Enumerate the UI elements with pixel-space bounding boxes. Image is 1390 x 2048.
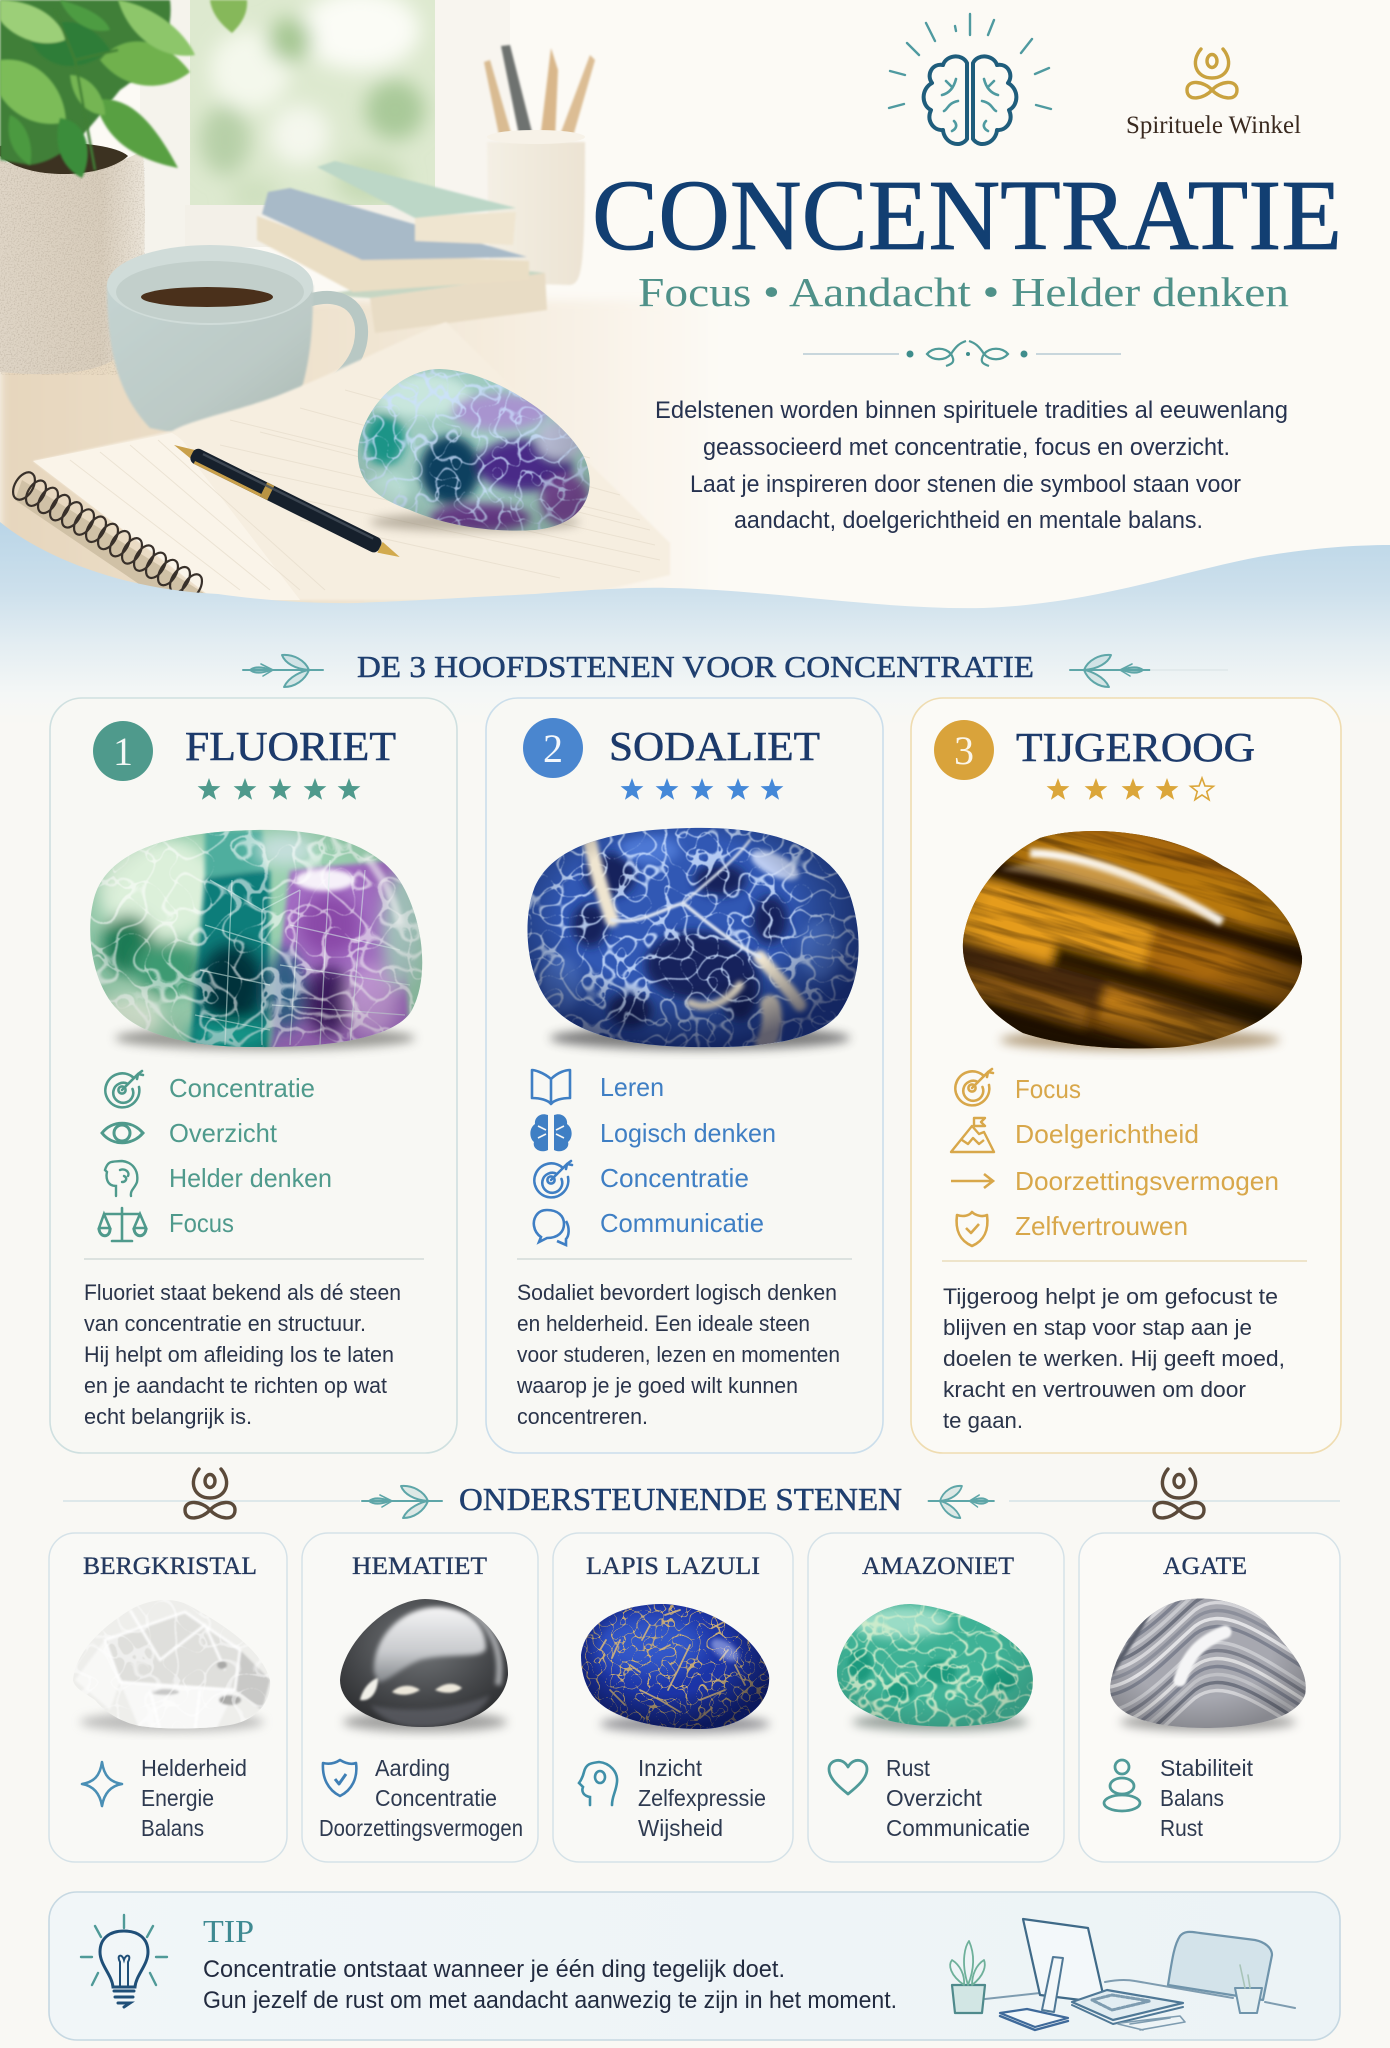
description sodaliet: waarop je je goed wilt kunnen <box>516 1373 798 1398</box>
description sodaliet: Sodaliet bevordert logisch denken <box>517 1280 837 1305</box>
stone: agate <box>1110 1598 1306 1738</box>
icon: target <box>105 1071 143 1107</box>
description tijgeroog: te gaan. <box>943 1408 1023 1433</box>
intro text: Edelstenen worden binnen spirituele tradities al eeuwenlang <box>655 397 1288 424</box>
icon: yoga right <box>1154 1469 1204 1518</box>
section heading: de 3 hoofdstenen: DE 3 HOOFDSTENEN VOOR CONCENTRATIE <box>357 649 1034 684</box>
icon: shield <box>957 1212 987 1246</box>
hero photo: desk scene with plant, mug, books, notebook and fluorite <box>0 0 671 604</box>
panel: fluoriet <box>50 698 457 1453</box>
stone: bergkristal <box>70 1595 275 1735</box>
card: lapis lazuli: LAPIS LAZULI <box>586 1553 760 1580</box>
card: hematiet <box>302 1533 538 1862</box>
pen <box>170 438 403 564</box>
coffee mug <box>107 245 362 440</box>
description fluoriet: echt belangrijk is. <box>84 1404 252 1429</box>
window frame <box>140 0 510 275</box>
rating stars <box>621 778 783 800</box>
benefits hematiet: Aarding <box>375 1755 450 1781</box>
benefits amazoniet <box>886 1755 1030 1841</box>
tip text: Gun jezelf de rust om met aandacht aanwezig te zijn in het moment. <box>203 1987 897 2014</box>
benefits lapis lazuli <box>638 1755 766 1841</box>
number badge 2 <box>523 718 583 778</box>
fluorite stone on notebook <box>350 365 600 535</box>
heading fluoriet: FLUORIET <box>185 723 396 769</box>
benefits bergkristal: Energie <box>141 1785 214 1811</box>
stone: amazoniet <box>830 1600 1040 1732</box>
stone: hematiet <box>335 1595 515 1735</box>
icon: arrow <box>951 1174 993 1188</box>
benefits hematiet: Doorzettingsvermogen <box>319 1815 523 1841</box>
description tijgeroog: doelen te werken. Hij geeft moed, <box>943 1346 1285 1371</box>
intro text: Laat je inspireren door stenen die symbool staan voor <box>690 471 1241 498</box>
benefits hematiet <box>319 1755 523 1841</box>
benefits list sodaliet: Communicatie <box>600 1208 764 1238</box>
icon: target <box>534 1161 572 1197</box>
ornament divider <box>803 341 1121 366</box>
description tijgeroog <box>943 1284 1285 1433</box>
logo: Spirituele Winkel: Spirituele Winkel <box>1126 112 1301 139</box>
benefits lapis lazuli: Inzicht <box>638 1755 703 1781</box>
subtitle: Focus • Aandacht • Helder denken <box>638 269 1289 315</box>
icon: chat <box>534 1210 569 1245</box>
benefits list tijgeroog <box>951 1069 1279 1246</box>
icon: mountain flag <box>951 1118 994 1152</box>
description sodaliet: concentreren. <box>517 1404 648 1429</box>
tip text <box>203 1956 897 2014</box>
section heading: ondersteunende stenen: ONDERSTEUNENDE STENEN <box>459 1481 902 1517</box>
benefits agate: Balans <box>1160 1785 1224 1811</box>
section heading: de 3 hoofdstenen <box>243 649 1228 687</box>
icon: target <box>955 1069 993 1105</box>
icon: stacked stones <box>1104 1760 1140 1811</box>
icon: eye <box>102 1123 143 1143</box>
stone: lapis lazuli <box>575 1600 775 1735</box>
card: amazoniet: AMAZONIET <box>862 1553 1014 1580</box>
description tijgeroog: kracht en vertrouwen om door <box>943 1377 1246 1402</box>
tip text: Concentratie ontstaat wanneer je één ding tegelijk doet. <box>203 1956 785 1983</box>
wave band <box>0 522 1390 730</box>
benefits list fluoriet: Overzicht <box>169 1118 278 1148</box>
desk illustration <box>950 1919 1295 2030</box>
icon: heart <box>829 1760 867 1794</box>
icon: lightbulb <box>81 1915 167 2007</box>
section heading: ondersteunende stenen <box>63 1469 1340 1518</box>
benefits lapis lazuli: Zelfexpressie <box>638 1785 766 1811</box>
icon: scales <box>99 1208 146 1241</box>
benefits amazoniet: Communicatie <box>886 1815 1030 1841</box>
card: agate: AGATE <box>1163 1553 1247 1580</box>
heading sodaliet: SODALIET <box>609 723 820 769</box>
description tijgeroog: Tijgeroog helpt je om gefocust te <box>943 1284 1278 1309</box>
description fluoriet: van concentratie en structuur. <box>84 1311 366 1336</box>
icon: sparkle <box>82 1762 122 1806</box>
benefits list fluoriet: Helder denken <box>169 1163 332 1193</box>
benefits list tijgeroog: Focus <box>1015 1074 1081 1104</box>
card: agate <box>1079 1533 1340 1862</box>
icon: shield <box>323 1760 356 1796</box>
number badge 1: 1 <box>113 729 133 774</box>
description fluoriet: en je aandacht te richten op wat <box>84 1373 387 1398</box>
card: lapis lazuli <box>553 1533 793 1862</box>
heading tijgeroog: TIJGEROOG <box>1016 724 1255 770</box>
stack of books <box>257 161 547 333</box>
stone: sodaliet <box>520 822 865 1052</box>
open notebook <box>33 322 670 600</box>
description tijgeroog: blijven en stap voor stap aan je <box>943 1315 1252 1340</box>
icon: book <box>532 1070 570 1104</box>
benefits amazoniet: Overzicht <box>886 1785 983 1811</box>
description sodaliet: voor studeren, lezen en momenten <box>517 1342 840 1367</box>
number badge 1 <box>93 721 153 781</box>
rating stars <box>1047 778 1213 800</box>
icon: brain <box>530 1114 572 1151</box>
card: bergkristal: BERGKRISTAL <box>83 1553 257 1580</box>
benefits list tijgeroog: Zelfvertrouwen <box>1015 1211 1188 1241</box>
benefits list fluoriet: Focus <box>169 1208 234 1238</box>
description sodaliet <box>516 1280 840 1429</box>
benefits bergkristal: Balans <box>141 1815 204 1841</box>
benefits list sodaliet: Leren <box>600 1072 664 1102</box>
number badge 3: 3 <box>954 728 974 773</box>
panel: sodaliet <box>486 698 883 1453</box>
benefits hematiet: Concentratie <box>375 1785 497 1811</box>
pencil cup with pencils <box>484 45 595 285</box>
benefits list tijgeroog: Doelgerichtheid <box>1015 1119 1199 1149</box>
description fluoriet <box>84 1280 401 1429</box>
number badge 2: 2 <box>543 726 563 771</box>
window with blurred garden <box>190 0 435 213</box>
title: CONCENTRATIE <box>592 159 1342 271</box>
description fluoriet: Fluoriet staat bekend als dé steen <box>84 1280 401 1305</box>
benefits list fluoriet: Concentratie <box>169 1073 315 1103</box>
icon: head <box>579 1762 617 1805</box>
logo: Spirituele Winkel <box>1126 49 1301 139</box>
benefits agate: Stabiliteit <box>1160 1755 1254 1781</box>
benefits bergkristal <box>141 1755 247 1841</box>
notebook spiral binding <box>9 469 215 605</box>
icon: head <box>105 1161 137 1196</box>
stone: fluoriet <box>85 825 430 1050</box>
intro text <box>655 397 1288 534</box>
benefits agate <box>1160 1755 1254 1841</box>
icon: yoga left <box>185 1469 235 1518</box>
number badge 3 <box>934 720 994 780</box>
benefits list sodaliet: Concentratie <box>600 1163 749 1193</box>
benefits amazoniet: Rust <box>886 1755 931 1781</box>
description sodaliet: en helderheid. Een ideale steen <box>517 1311 810 1336</box>
benefits agate: Rust <box>1160 1815 1204 1841</box>
card: hematiet: HEMATIET <box>352 1553 487 1580</box>
table top <box>0 300 720 620</box>
tip heading: TIP <box>203 1913 254 1949</box>
intro text: geassocieerd met concentratie, focus en overzicht. <box>703 434 1230 461</box>
stone: tijgeroog <box>962 831 1302 1058</box>
card: amazoniet <box>808 1533 1064 1862</box>
icon: brain with rays <box>889 14 1051 144</box>
description fluoriet: Hij helpt om afleiding los te laten <box>84 1342 394 1367</box>
benefits list sodaliet: Logisch denken <box>600 1118 776 1148</box>
benefits list tijgeroog: Doorzettingsvermogen <box>1015 1166 1279 1196</box>
card: bergkristal <box>49 1533 287 1862</box>
benefits list sodaliet <box>530 1070 776 1245</box>
benefits bergkristal: Helderheid <box>141 1755 247 1781</box>
benefits list fluoriet <box>99 1071 332 1241</box>
rating stars <box>198 778 360 800</box>
plant leaves <box>0 0 247 178</box>
panel: tip <box>49 1892 1340 2040</box>
plant pot <box>0 142 145 375</box>
panel: tijgeroog <box>910 697 1342 1454</box>
benefits lapis lazuli: Wijsheid <box>638 1815 723 1841</box>
intro text: aandacht, doelgerichtheid en mentale balans. <box>734 507 1203 534</box>
